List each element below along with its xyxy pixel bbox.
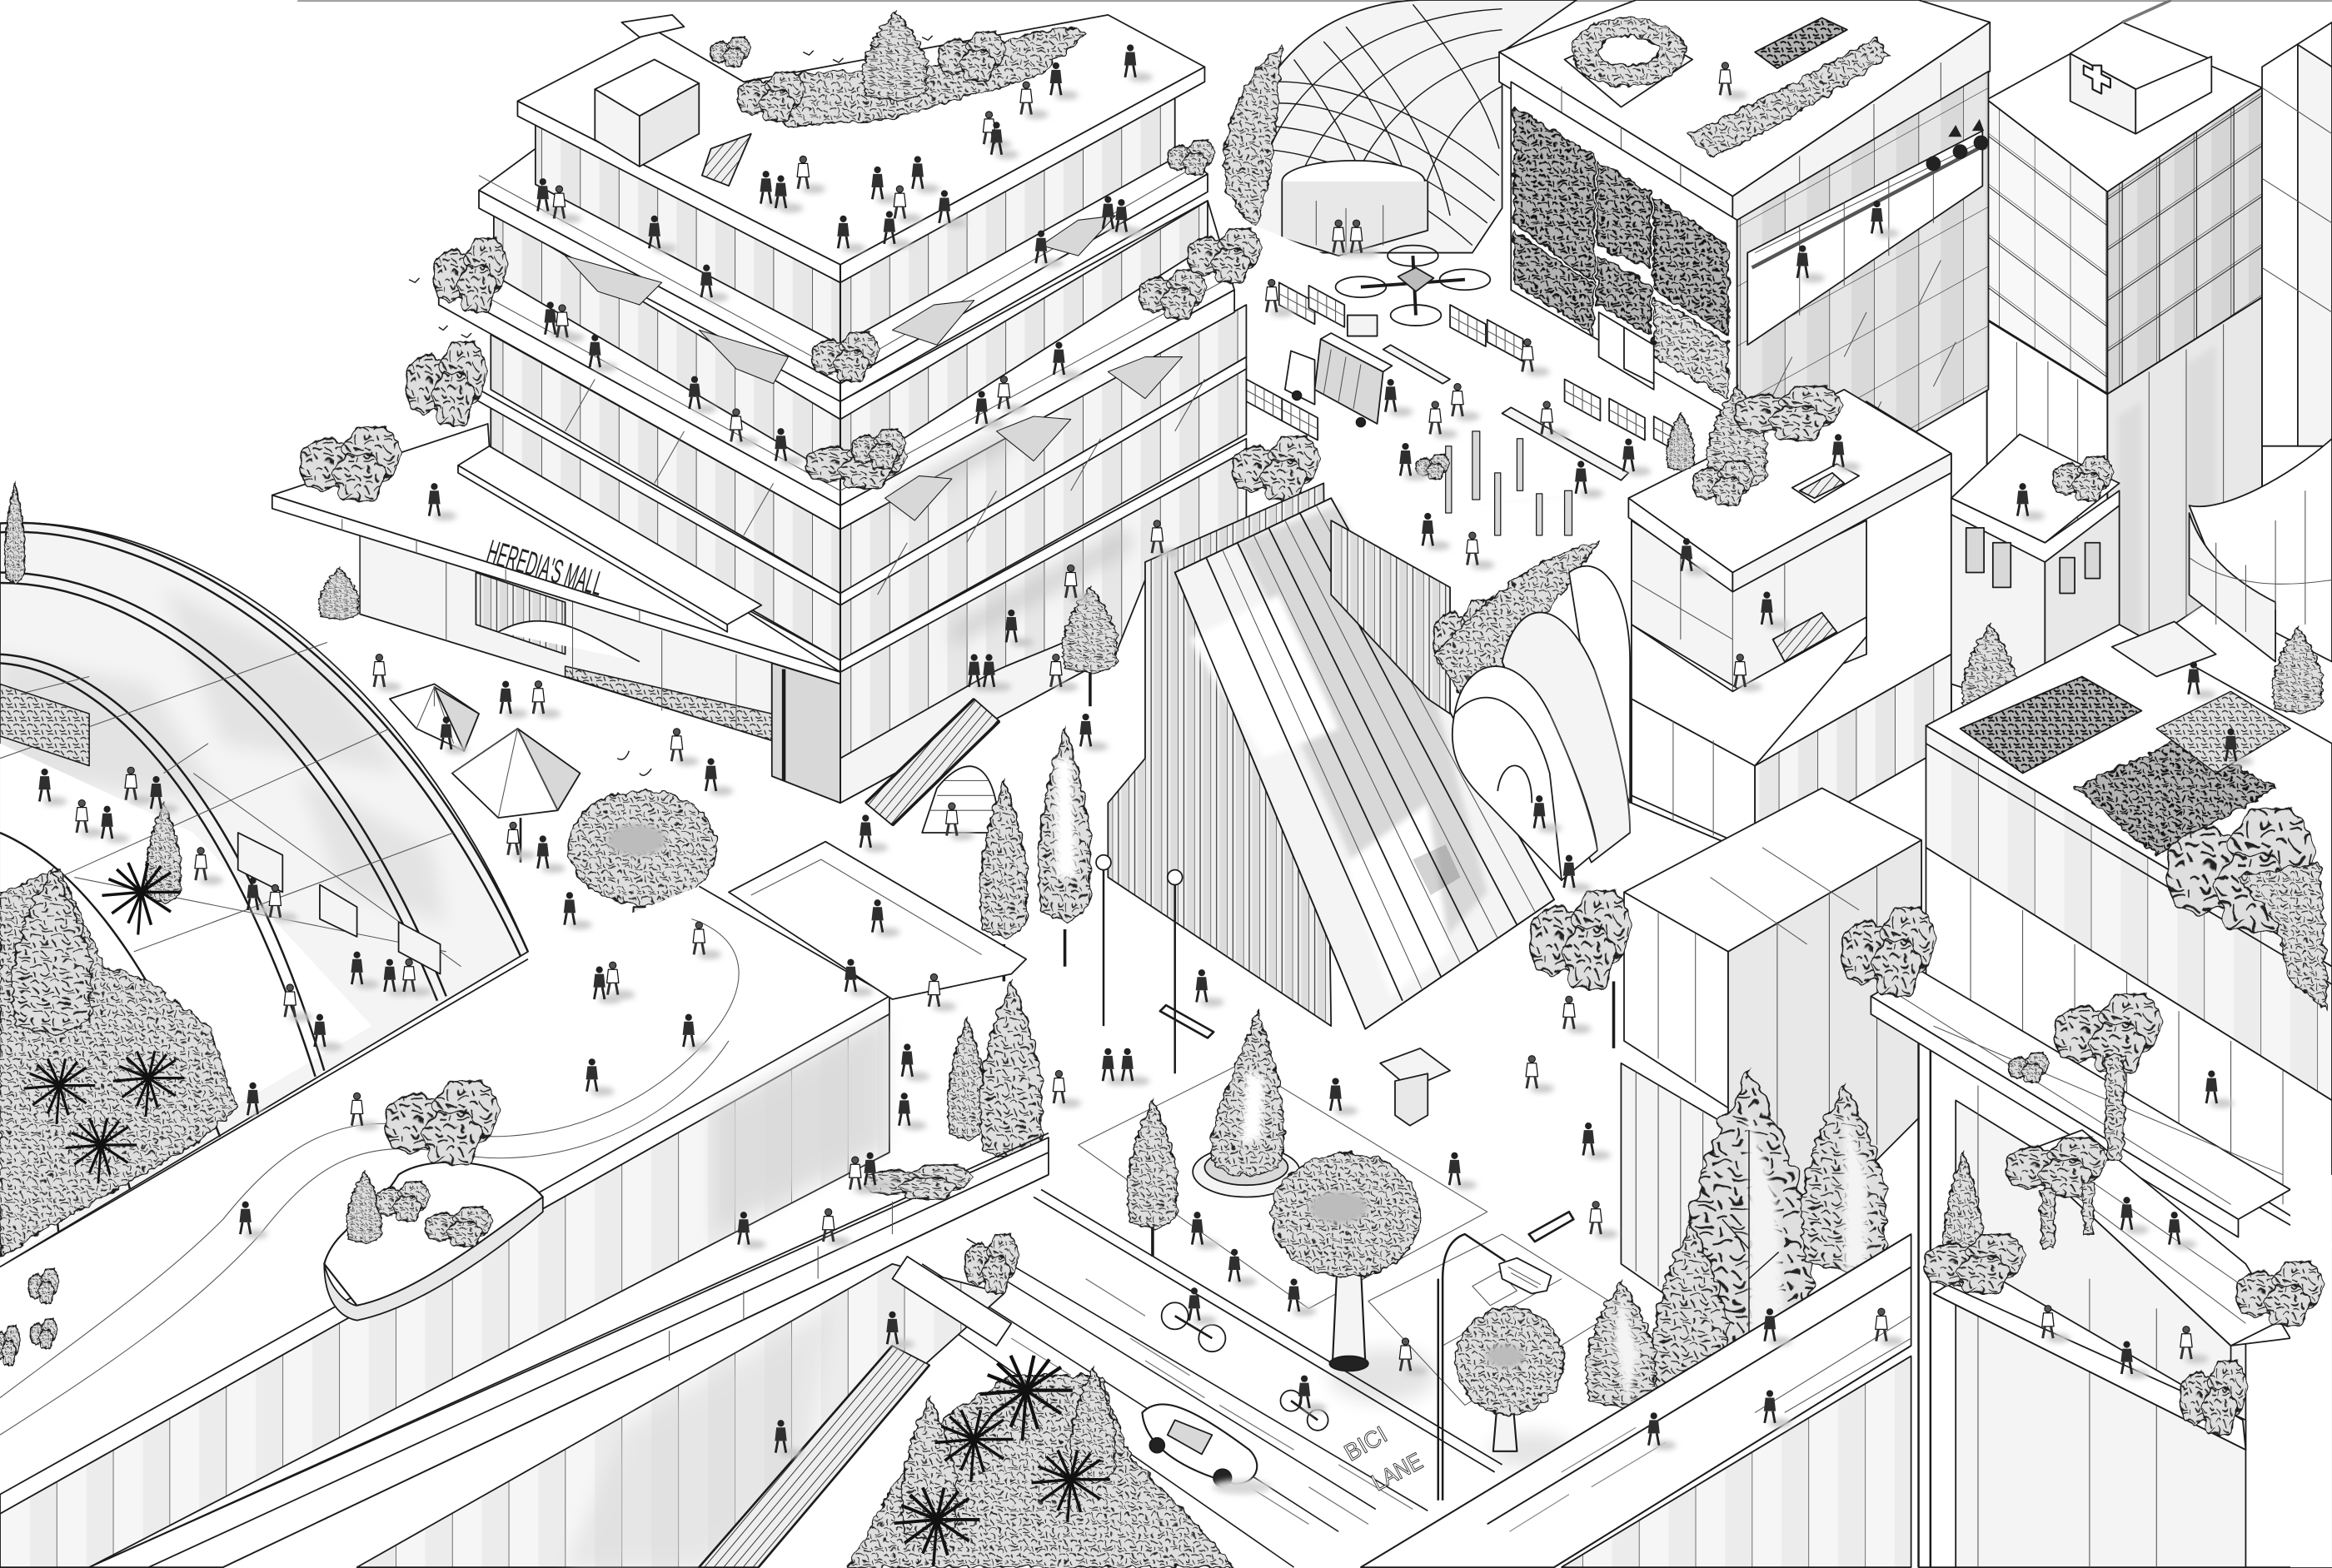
right tower	[2262, 22, 2332, 446]
dome gardens	[0, 483, 238, 1257]
construction plaza	[1234, 223, 1690, 570]
hospital tower	[1987, 27, 2262, 670]
terrace and path	[0, 886, 889, 1567]
building behind A-frame	[1331, 520, 1599, 714]
small rooftop building	[1951, 434, 2120, 721]
delivery truck	[1285, 333, 1392, 426]
office cutaway	[1747, 119, 1988, 345]
mall terrace shrubs	[406, 140, 1319, 501]
drone	[1336, 246, 1490, 326]
small tree at canopy	[320, 568, 359, 620]
rooftop farm building	[1926, 621, 2332, 1242]
bottom palm garden	[848, 1356, 1234, 1567]
big white box	[1530, 788, 1921, 1338]
round street trees	[1272, 1152, 1563, 1451]
mall roof garden	[710, 12, 1086, 127]
cyclists	[1162, 1287, 1328, 1431]
plaza markings and street	[899, 1063, 1621, 1567]
canopy with store front	[272, 424, 840, 803]
vertical garden panels	[1514, 107, 1728, 399]
office cutaway building	[1628, 386, 1951, 855]
outdoor stairs	[699, 1346, 929, 1567]
elevated walkway	[1361, 1234, 1911, 1567]
central A-frame building	[1108, 483, 1554, 1029]
cafe umbrellas and diners	[390, 684, 651, 873]
curved glass building	[2190, 439, 2332, 713]
dome side shrubs	[1224, 45, 1282, 231]
rooftop planters	[1565, 17, 1889, 156]
back dome	[1243, 0, 1577, 257]
top frame line	[297, 0, 2332, 2]
sunken planter court	[729, 842, 1026, 999]
bici lane marking: LANE	[1368, 1448, 1428, 1496]
glass dome	[0, 523, 528, 1267]
bici lane marking: BICI	[1340, 1421, 1392, 1466]
mall escalator and stair	[865, 699, 999, 833]
pedestrians	[240, 44, 1904, 1457]
lower right glass building	[1841, 906, 2332, 1567]
street furniture	[1096, 855, 1573, 1501]
street trees	[949, 587, 1886, 1406]
rooftop structure and stair	[595, 15, 751, 186]
ramp and railing	[89, 1133, 1049, 1567]
car	[1142, 1404, 1272, 1495]
text: HEREDIA'S MALL	[483, 533, 608, 603]
white arches	[1453, 566, 1630, 880]
round tree on terrace	[568, 791, 717, 1011]
hospital rooftop cross box	[2070, 0, 2211, 134]
dome visitors	[38, 767, 446, 1120]
main mall building	[439, 15, 1246, 803]
fountain	[1193, 1011, 1300, 1197]
bici lane marking	[1340, 1421, 1428, 1496]
green wall building	[1499, 0, 1990, 535]
ground shadows	[595, 336, 1592, 1467]
birds	[409, 36, 933, 337]
